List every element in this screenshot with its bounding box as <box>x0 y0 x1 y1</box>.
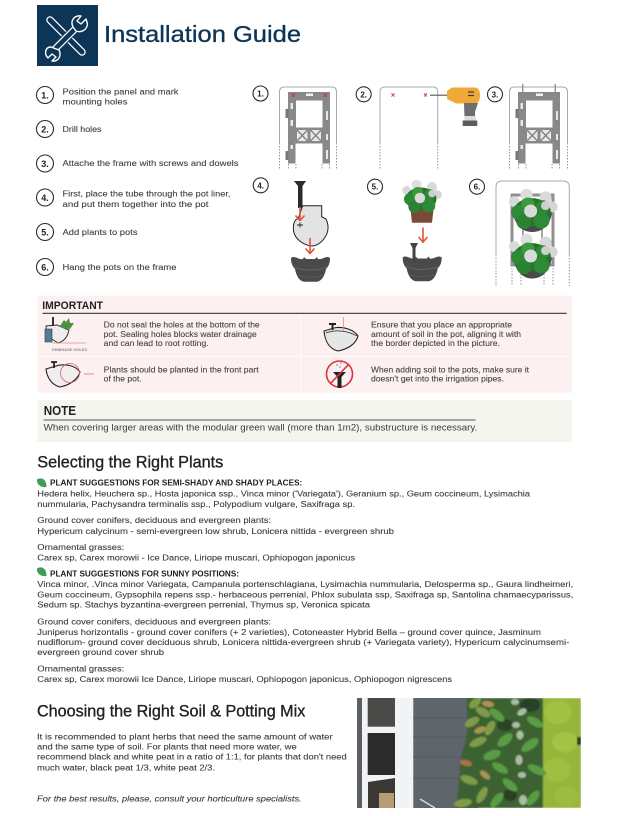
note heading: NOTE <box>44 404 76 418</box>
note text: When covering larger areas with the modular green wall (more than 1m2), substructure is necessary. <box>44 423 477 433</box>
step 2 <box>36 120 102 138</box>
text: do not seal <box>104 320 260 348</box>
list: sunny plants: Ornamental grasses: <box>37 664 124 674</box>
subheading: semi-shady: PLANT SUGGESTIONS FOR SEMI-SHADY AND SHADY PLACES: <box>50 478 302 488</box>
step 4: and put them together into the pot <box>62 199 209 209</box>
step 1: Position the panel and mark <box>62 86 179 96</box>
icon: no soil in pipes <box>326 361 352 388</box>
diagram 5: plant above pot: 5. <box>372 183 378 192</box>
icon: soil level in pot <box>324 317 358 351</box>
step 6: Hang the pots on the frame <box>62 262 177 272</box>
list: semi-shady plants: Ground cover conifers, deciduous and evergreen plants: <box>37 515 271 525</box>
list: semi-shady plants: Carex sp, Carex morowii - Ice Dance, Liriope muscari, Ophiopogon japonicus <box>37 553 356 563</box>
icon: drainage holes <box>45 317 88 352</box>
text: irrigation pipes: doesn't get into the irrigation pipes. <box>371 374 504 384</box>
icon: crossed wrench and screwdriver <box>37 5 98 66</box>
icon: plant at front of pot <box>46 362 94 387</box>
heading: Choosing the Right Soil & Potting Mix <box>37 701 306 720</box>
list: sunny plants: Sedum sp. Stachys byzantina-evergreen perrenial, Thymus sp, Veronica spicata <box>37 600 370 610</box>
diagram 3: frame fixed with screws <box>488 84 568 170</box>
text: irrigation pipes: When adding soil to the pots, make sure it <box>371 365 530 375</box>
step 4 <box>36 188 230 209</box>
diagram 6: finished wall <box>470 179 569 286</box>
step 5: 5. <box>41 228 49 238</box>
text: irrigation pipes <box>371 365 530 384</box>
list: sunny plants: Juniperus horizontalis - ground cover conifers (+ 2 varieties), Cotoneaster Hybrid Bella – ground cover quince, Jasminum <box>37 627 541 637</box>
photo: living green wall <box>357 695 581 809</box>
title: Installation Guide <box>104 21 301 47</box>
text: soil amount <box>371 320 521 348</box>
soil text: It is recommended to plant herbs that need the same amount of water <box>37 731 333 741</box>
text: front part: of the pot. <box>104 374 142 384</box>
leaf icon <box>37 478 46 487</box>
step 5 <box>36 224 138 240</box>
soil text: recommend black and white peat in a ratio of 1:1, for plants that don't need <box>37 752 347 762</box>
text: front part <box>104 365 259 384</box>
soil text <box>37 731 347 772</box>
diagram 4: tube and liner into pot <box>253 178 330 282</box>
important heading: IMPORTANT <box>42 300 103 312</box>
list: sunny plants: Ground cover conifers, deciduous and evergreen plants: <box>37 617 271 627</box>
step 1 <box>36 86 179 106</box>
list: sunny plants: Geum coccineum, Gypsophila repens ssp.- herbaceous perrenial, Phlox subulata ssp, Saxifraga sp, Santolina chamaecyparissus, <box>37 590 573 600</box>
list: semi-shady plants: Hypericum calycinum - semi-evergreen low shrub, Lonicera nittida - evergreen shrub <box>37 526 394 536</box>
diagram 6: finished wall: 6. <box>474 183 480 192</box>
panel: note <box>37 400 572 442</box>
soil text: much water, black peat 1/3, white peat 2/3. <box>37 762 215 772</box>
step 6 <box>36 258 177 276</box>
list: semi-shady plants <box>37 489 530 563</box>
heading: Selecting the Right Plants <box>37 452 223 471</box>
leaf icon <box>37 567 46 576</box>
step 4: 4. <box>41 193 49 203</box>
section: choosing soil <box>37 701 347 803</box>
step 5: Add plants to pots <box>62 227 138 237</box>
list: sunny plants: nudiflorum- ground cover deciduous shrub, Lonicera nittida-evergreen shrub (+ Variegata variety), Hypericum calycinumsemi- <box>37 637 569 647</box>
icon: drainage holes: DRAINAGE HOLES <box>52 348 88 352</box>
diagram 1: panel on wall <box>253 86 336 170</box>
list: semi-shady plants: nummularia, Pachysandra terminalis ssp., Polypodium vulgare, Saxifraga sp. <box>37 499 355 509</box>
step 1: 1. <box>41 90 49 100</box>
diagram 3: frame fixed with screws: 3. <box>492 90 498 99</box>
list: semi-shady plants: Ornamental grasses: <box>37 542 124 552</box>
step 3: 3. <box>41 159 49 169</box>
step 4: First, place the tube through the pot liner, <box>62 188 230 198</box>
step 2: Drill holes <box>62 124 102 134</box>
list: sunny plants: Carex sp, Carex morowii Ice Dance, Liriope muscari, Ophiopogon japonicus, Ophiopogon nigrescens <box>37 674 453 684</box>
text: soil amount: amount of soil in the pot, aligning it with <box>371 329 521 339</box>
text: do not seal: Do not seal the holes at the bottom of the <box>104 320 260 330</box>
subheading: sunny: PLANT SUGGESTIONS FOR SUNNY POSITIONS: <box>50 569 239 579</box>
italic note: For the best results, please, consult your horticulture specialists. <box>37 793 302 803</box>
step 3: Attache the frame with screws and dowels <box>62 158 239 168</box>
diagram 1: panel on wall: 1. <box>257 90 264 98</box>
text: do not seal: pot. Sealing holes blocks water drainage <box>104 329 257 339</box>
list: sunny plants <box>37 579 573 684</box>
diagram 2: drilling holes: 2. <box>360 90 367 99</box>
list: sunny plants: Vinca minor, .Vinca minor Variegata, Campanula portenschlagiana, Lysimachia nummularia, Delosperma sp., Gaura lindheimeri, <box>37 579 573 589</box>
step list <box>36 86 239 276</box>
step 2: 2. <box>41 124 49 134</box>
step 1: mounting holes <box>62 96 128 106</box>
soil text: and the same type of soil. For plants that need more water, we <box>37 742 297 752</box>
diagram 2: drilling holes <box>356 87 480 170</box>
panel: important <box>37 296 572 393</box>
text: front part: Plants should be planted in the front part <box>104 365 259 375</box>
section: selecting the right plants <box>37 452 573 684</box>
text: soil amount: the border depicted in the picture. <box>371 338 500 348</box>
step 6: 6. <box>41 262 49 272</box>
list: semi-shady plants: Hedera helix, Heuchera sp., Hosta japonica ssp., Vinca minor ('Variegata'), Geranium sp., Geum coccineum, Lysimachia <box>37 489 530 499</box>
list: sunny plants: evergreen ground cover shrub <box>37 647 164 657</box>
diagram 4: tube and liner into pot: 4. <box>257 181 264 190</box>
text: soil amount: Ensure that you place an appropriate <box>371 320 512 330</box>
text: do not seal: and can lead to root rotting. <box>104 338 209 348</box>
step 3 <box>36 155 239 172</box>
diagram 5: plant above pot <box>368 179 442 281</box>
